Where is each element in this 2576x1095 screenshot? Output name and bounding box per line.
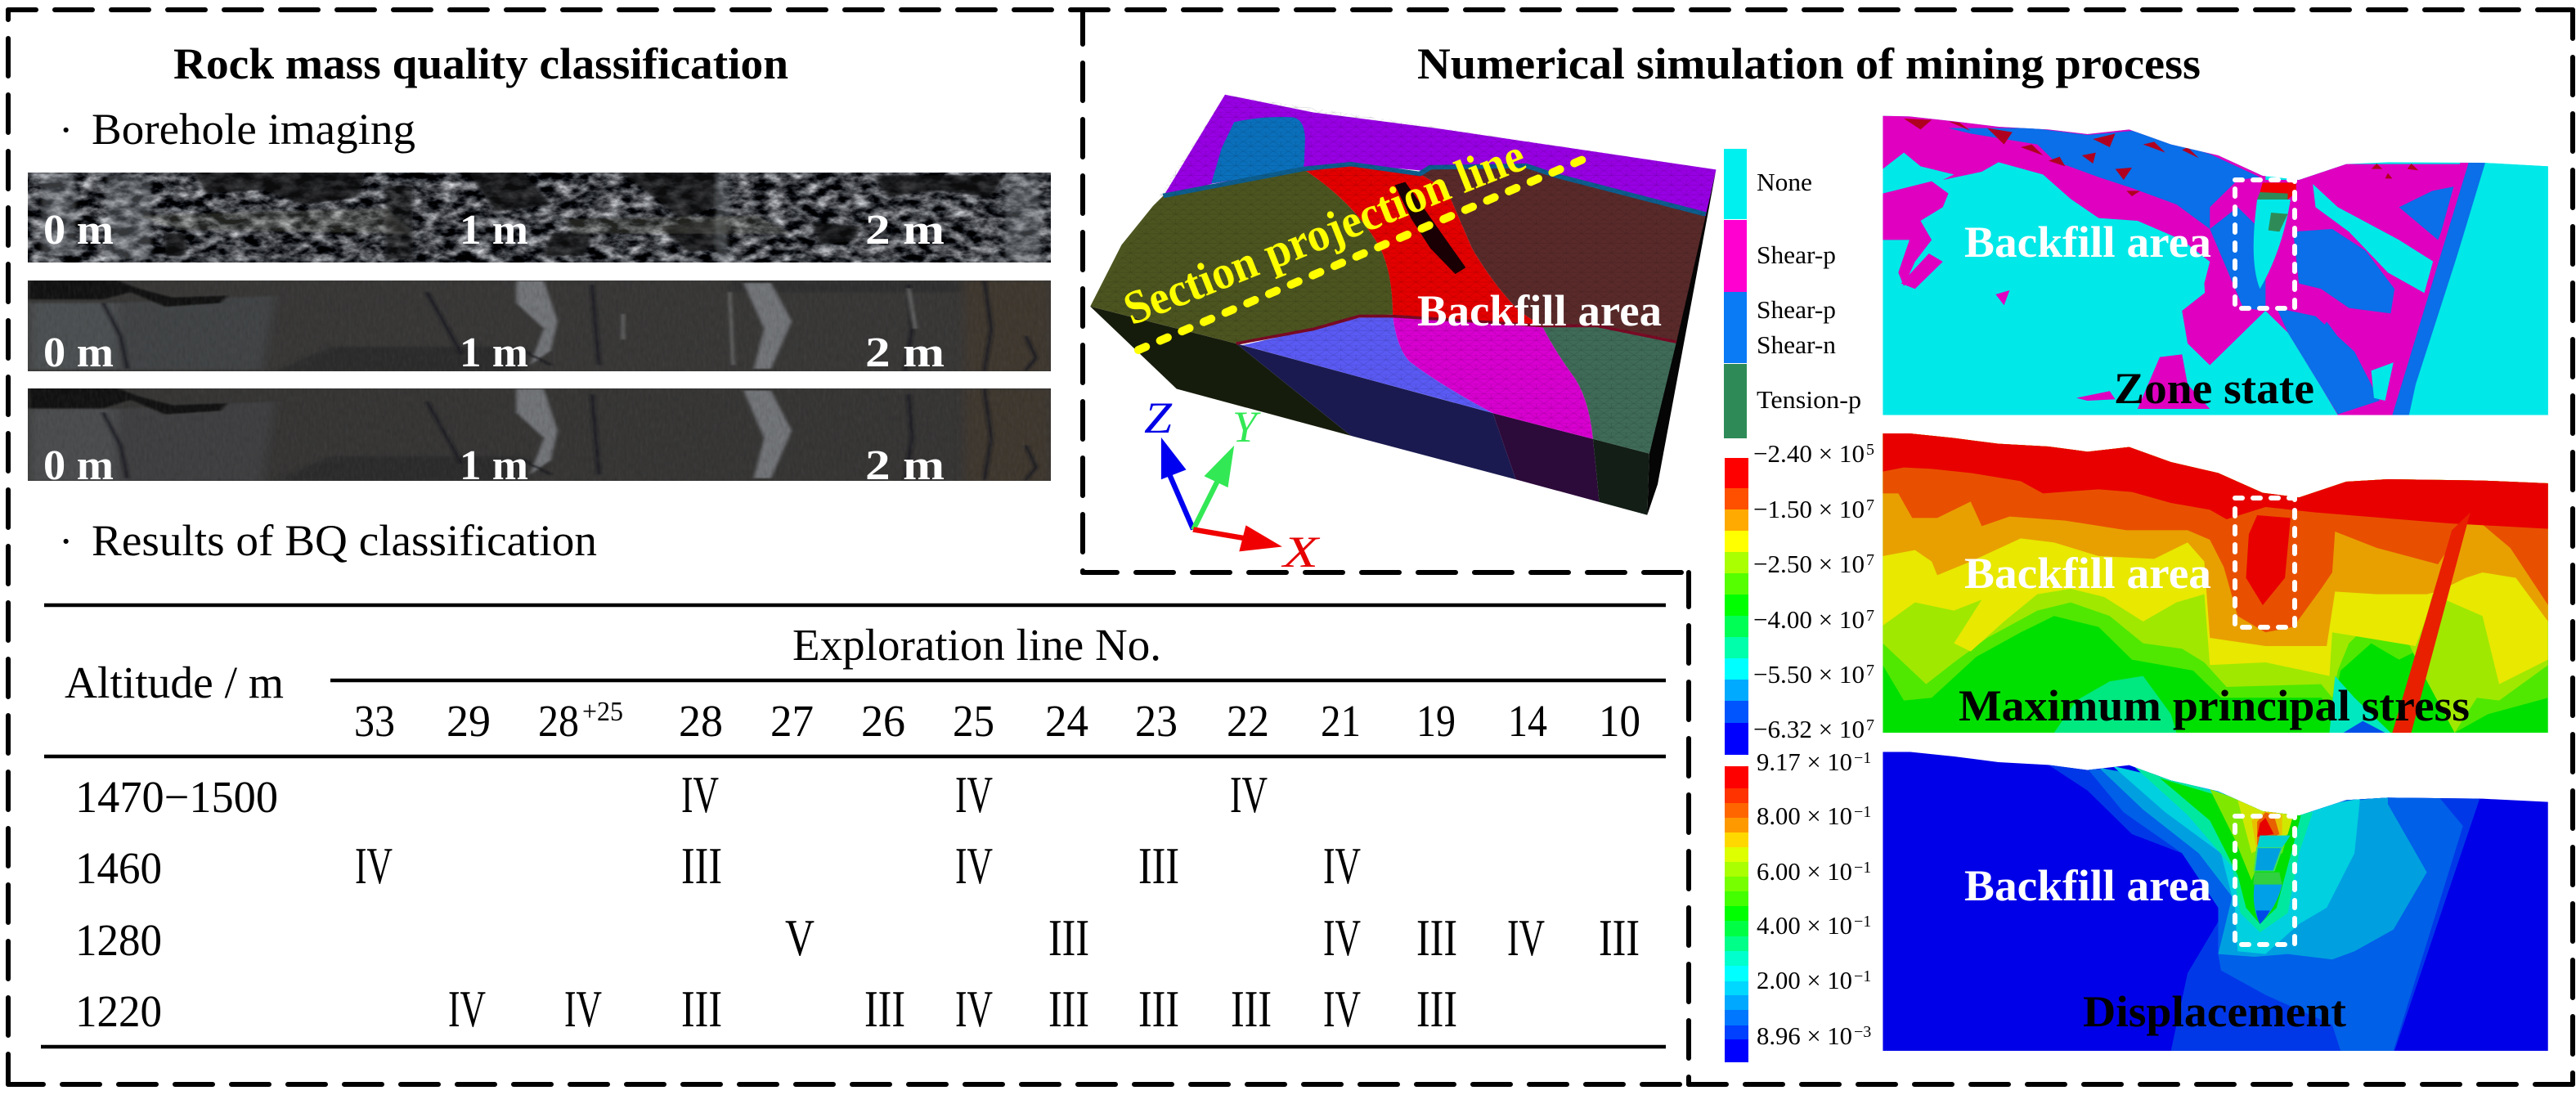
backfill marker: [2235, 498, 2295, 627]
row 1470-1500: IV: [955, 765, 993, 823]
row 1280: IV: [1323, 909, 1361, 967]
row 1220: III: [1138, 980, 1179, 1038]
row 1280: IV: [1507, 909, 1545, 967]
legend: displacement colour bar: 6.00 × 10: [1757, 857, 1852, 886]
panel: numerical simulation of mining process: [1090, 39, 2549, 1062]
table header: 27: [770, 696, 814, 746]
depth labels: 1 m: [460, 330, 528, 376]
legend: maximum principal stress colour bar: 7: [1866, 662, 1874, 680]
legend: maximum principal stress colour bar: 7: [1866, 607, 1874, 625]
legend: displacement colour bar: −1: [1854, 749, 1871, 767]
depth labels: [43, 442, 945, 489]
depth labels: [43, 330, 945, 376]
section projection line: [1138, 156, 1591, 350]
label: backfill area: Backfill area: [1964, 861, 2211, 910]
row 1470-1500: 1470−1500: [75, 772, 278, 822]
row 1460: IV: [955, 837, 993, 895]
icon: XYZ coordinate axes: X: [1281, 527, 1321, 577]
row 1460: III: [681, 837, 722, 895]
row 1220: 1220: [75, 986, 162, 1036]
row 1460: IV: [355, 837, 393, 895]
depth labels: 1 m: [460, 207, 528, 254]
label: backfill area: Backfill area: [1417, 286, 1662, 335]
row 1460: 1460: [75, 843, 162, 893]
depth labels: 2 m: [865, 442, 945, 489]
label: backfill area: Backfill area: [1964, 218, 2211, 267]
legend: maximum principal stress colour bar: [1725, 439, 1874, 755]
depth labels: 1 m: [460, 442, 528, 489]
icon: XYZ coordinate axes: [1144, 393, 1321, 577]
row 1280: III: [1599, 909, 1640, 967]
row 1220: III: [1416, 980, 1457, 1038]
label: backfill area: Backfill area: [1964, 549, 2211, 598]
legend: maximum principal stress colour bar: −5.50 × 10: [1753, 660, 1865, 689]
icon: XYZ coordinate axes: Y: [1232, 402, 1261, 451]
legend: displacement colour bar: 8.96 × 10: [1757, 1021, 1852, 1050]
borehole image strip 1: [28, 173, 1051, 263]
legend: maximum principal stress colour bar: −2.50 × 10: [1753, 550, 1865, 578]
table: BQ classification results: [41, 605, 1666, 1047]
subheading: results of BQ classification: ·: [59, 518, 73, 565]
table header: [65, 620, 1640, 746]
label: zone state: Zone state: [2114, 364, 2314, 413]
row 1220: III: [864, 980, 905, 1038]
legend: displacement colour bar: −3: [1854, 1023, 1871, 1041]
depth labels: 0 m: [43, 207, 114, 254]
table header: 19: [1416, 696, 1456, 746]
table header: 10: [1599, 696, 1640, 746]
heading: numerical simulation: Numerical simulation of mining process: [1417, 39, 2201, 88]
table header: 22: [1227, 696, 1269, 746]
icon: XYZ coordinate axes: Z: [1144, 393, 1173, 442]
row 1220: IV: [1323, 980, 1361, 1038]
label: section projection line: Section projection line: [1116, 128, 1533, 335]
chart: displacement section: [1883, 750, 2548, 1051]
depth labels: 2 m: [865, 207, 945, 254]
row 1280: 1280: [75, 915, 162, 965]
row 1220: IV: [564, 980, 602, 1038]
legend: displacement colour bar: −1: [1854, 803, 1871, 821]
label: displacement: Displacement: [2083, 987, 2346, 1036]
legend: displacement colour bar: 9.17 × 10: [1757, 747, 1852, 776]
row 1220: III: [681, 980, 722, 1038]
depth labels: 2 m: [865, 330, 945, 376]
row 1220: III: [1231, 980, 1272, 1038]
row 1280: [75, 909, 1640, 967]
row 1460: III: [1138, 837, 1179, 895]
row 1220: IV: [448, 980, 486, 1038]
legend: zone state: Shear-p: [1757, 240, 1836, 269]
chart: zone state section: [1883, 114, 2549, 415]
legend: maximum principal stress colour bar: 5: [1866, 441, 1874, 459]
legend: zone state: Tension-p: [1757, 385, 1861, 414]
subheading: borehole imaging: ·: [59, 107, 73, 154]
legend: zone state: None: [1757, 168, 1812, 196]
chart: maximum principal stress section: [1883, 431, 2548, 733]
row 1280: V: [785, 909, 815, 967]
row 1460: IV: [1323, 837, 1361, 895]
table header: 21: [1321, 696, 1361, 746]
table header: Exploration line No.: [792, 620, 1161, 670]
backfill marker: [2235, 816, 2295, 945]
depth labels: 0 m: [43, 330, 114, 376]
row 1220: III: [1048, 980, 1089, 1038]
3D mesh model: [1090, 95, 1716, 515]
table header: Altitude / m: [65, 657, 284, 707]
legend: maximum principal stress colour bar: −4.00 × 10: [1753, 605, 1865, 634]
legend: displacement colour bar: −1: [1854, 967, 1871, 985]
borehole image strip 3: [28, 388, 1051, 489]
row 1470-1500: [75, 765, 1268, 823]
row 1470-1500: IV: [1230, 765, 1268, 823]
depth labels: [43, 207, 945, 254]
legend: maximum principal stress colour bar: −6.32 × 10: [1753, 715, 1865, 743]
legend: displacement colour bar: 2.00 × 10: [1757, 966, 1852, 994]
table header: +25: [582, 697, 623, 727]
depth labels: 0 m: [43, 442, 114, 489]
backfill marker: [2235, 180, 2295, 308]
table header: 29: [447, 696, 491, 746]
subheading: borehole imaging: Borehole imaging: [92, 105, 415, 154]
row 1470-1500: IV: [681, 765, 719, 823]
legend: maximum principal stress colour bar: 7: [1866, 496, 1874, 514]
legend: displacement colour bar: [1725, 747, 1871, 1062]
table header: 33: [354, 696, 395, 746]
legend: displacement colour bar: −1: [1854, 913, 1871, 931]
legend: displacement colour bar: 4.00 × 10: [1757, 911, 1852, 940]
subheading: results of BQ classification: Results of BQ classification: [92, 516, 597, 565]
legend: displacement colour bar: 8.00 × 10: [1757, 801, 1852, 830]
row 1220: IV: [955, 980, 993, 1038]
table header: 25: [953, 696, 994, 746]
legend: maximum principal stress colour bar: −2.40 × 10: [1753, 439, 1865, 468]
table header: 28: [538, 696, 579, 746]
row 1460: [75, 837, 1361, 895]
legend: maximum principal stress colour bar: 7: [1866, 551, 1874, 569]
row 1280: III: [1048, 909, 1089, 967]
heading: rock mass quality classification: Rock mass quality classification: [173, 39, 788, 88]
table header: 14: [1508, 696, 1547, 746]
legend: zone state: [1724, 149, 1861, 438]
legend: maximum principal stress colour bar: 7: [1866, 716, 1874, 734]
label: maximum principal stress: Maximum principal stress: [1959, 681, 2470, 730]
legend: zone state: Shear-n: [1757, 330, 1836, 359]
row 1280: III: [1416, 909, 1457, 967]
table header: 24: [1045, 696, 1088, 746]
borehole image strip 2: [28, 280, 1051, 376]
row 1220: [75, 980, 1457, 1038]
legend: displacement colour bar: −1: [1854, 859, 1871, 877]
table header: 28: [679, 696, 723, 746]
table header: 23: [1135, 696, 1178, 746]
table header: 26: [861, 696, 905, 746]
legend: zone state: Shear-p: [1757, 295, 1836, 324]
panel: rock mass quality classification: [28, 39, 1666, 1047]
legend: maximum principal stress colour bar: −1.50 × 10: [1753, 495, 1865, 523]
